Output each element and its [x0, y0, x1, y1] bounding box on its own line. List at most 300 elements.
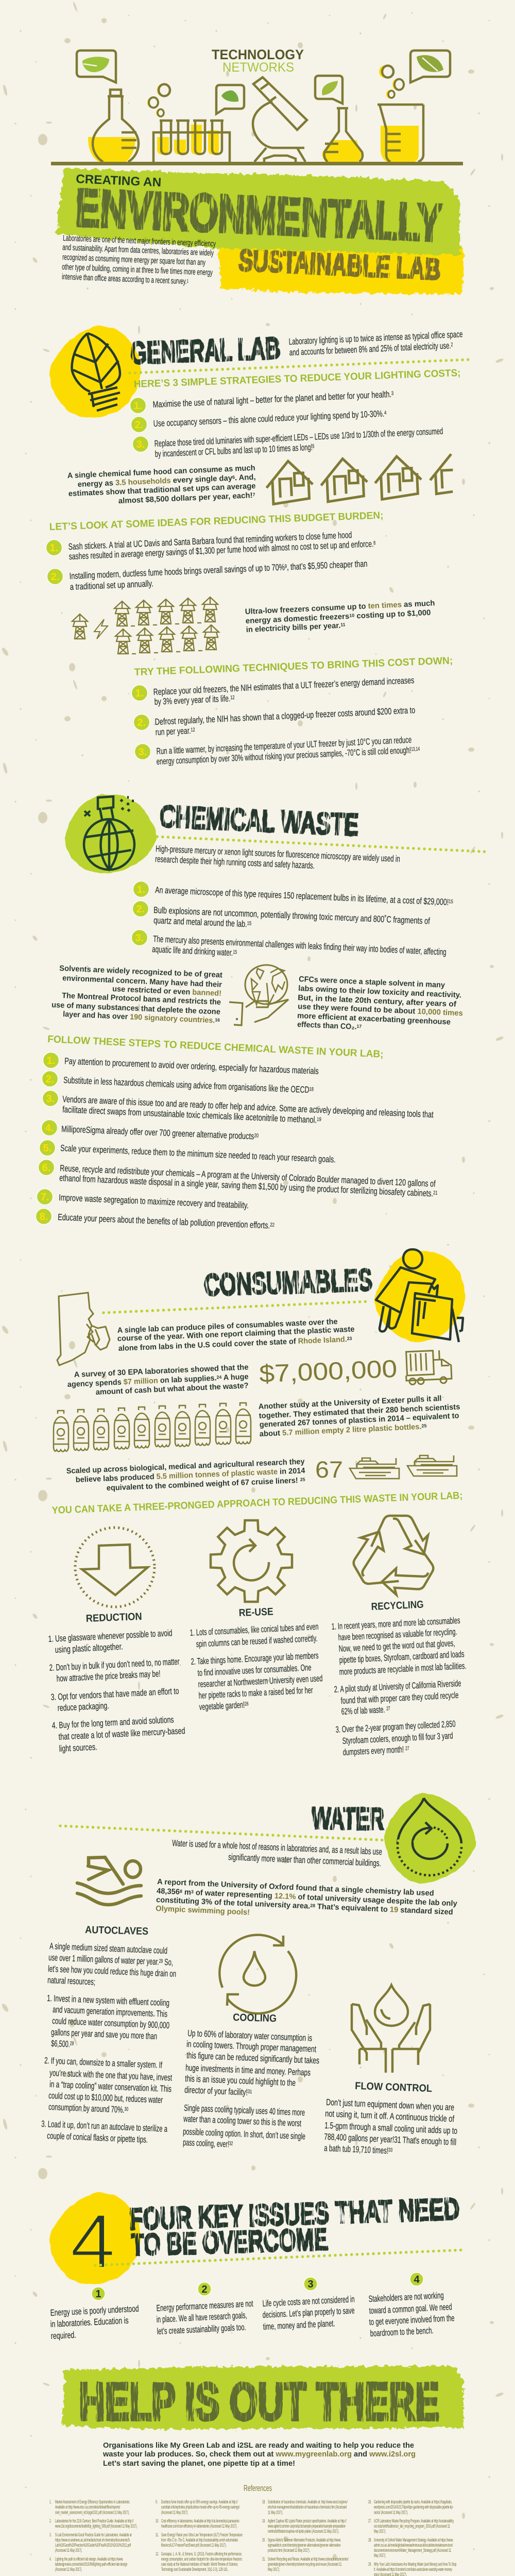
issue 3: 3 — [307, 2279, 314, 2290]
references column 3: methods/filtration/captiva-nd-lipids-plates (Accessed 11 May 2017). — [268, 2529, 339, 2534]
column: cooling: huge investments in time and money. Perhaps — [185, 2062, 311, 2078]
icon: microscope — [253, 77, 307, 162]
list: freezer techniques: 2. — [138, 717, 146, 728]
text: organisations — [102, 2441, 416, 2468]
icon: big number four: 4 — [70, 2198, 115, 2284]
text: Oxford report — [156, 1877, 458, 1917]
issue 4: to get everyone involved from the — [369, 2313, 455, 2327]
list: fume hood ideas: sashes resulted in average energy savings of $1,300 per fume hood with almost no cost to set up and enforce.8 — [68, 538, 376, 562]
text: CFCs: more efficient at exacerbating greenhouse — [297, 1011, 451, 1026]
icon: speech bubble leaf 1 — [77, 50, 116, 82]
text: solvents: The Montreal Protocol bans and restricts the — [62, 991, 221, 1007]
references column 3 — [262, 2499, 355, 2576]
column: recycling: RECYCLING — [371, 1599, 424, 1613]
column: re-use — [190, 1606, 323, 1712]
logo: Technology Networks — [212, 47, 304, 75]
references column 3: 19. — [262, 2518, 266, 2524]
icon: bubbles left — [147, 84, 170, 116]
text: fume hood energy: energy as 3.5 households every single day6. And, — [77, 473, 256, 489]
panel: water — [41, 1793, 476, 2156]
text: EPA survey: amount of cash but what about the waste? — [95, 1381, 249, 1397]
text: CFCs — [297, 975, 463, 1031]
references column 2: Gumapas, L. A. M., & Simons, G. (2013). Factors affecting the performance, — [161, 2551, 242, 2557]
text: EPA survey: agency spends $7 million on lab supplies.24 A huge — [67, 1372, 249, 1389]
list: chemical waste steps: MilliporeSigma already offer over 700 greener alternative products20 — [61, 1124, 259, 1142]
references column 1: S-Lab Environmental Good Practice Guide for Laboratories. Available at — [55, 2532, 132, 2538]
references column 3: sigmaaldrich.com/chemistry/greener-alternatives/greener-alternative- — [268, 2543, 341, 2548]
text: Oxford report: constituting 3% of the total university area.28 That’s equivalent to 19 standard sized — [156, 1895, 453, 1917]
column: autoclaves: 1. Invest in a new system with effluent cooling — [47, 1993, 169, 2008]
text: EPA survey: A survey of 30 EPA laboratories showed that the — [74, 1363, 249, 1379]
text: lighting intensity — [288, 329, 463, 358]
list: chemical waste steps: Improve waste segregation to maximize recovery and treatability. — [59, 1192, 249, 1210]
column: autoclaves: could cost up to $10,000 but, reduces water — [48, 2090, 163, 2105]
list: lighting strategies: Use occupancy sensors – this alone could reduce your lighting spend by 10-30%.4 — [153, 408, 387, 429]
references column 4: UCR Laboratory Waste Recycling Program. Available at http://sustainability. — [374, 2518, 454, 2524]
panel: four key issues — [50, 2192, 465, 2341]
icon: test tube rack — [153, 121, 230, 162]
column: cooling: this figure can be reduced significantly but takes — [186, 2050, 320, 2065]
panel: help is out there — [62, 2366, 464, 2468]
list: chemical waste steps: Pay attention to procurement to avoid over ordering, especially for hazardous materials — [64, 1056, 319, 1076]
text: CFCs: use they were found to be about 10,000 times — [298, 1002, 463, 1018]
text: ultra-low freezers: energy as domestic freezers10 costing up to $1,000 — [245, 608, 431, 625]
list: microscope facts — [132, 881, 453, 958]
text: piles of waste — [117, 1317, 355, 1353]
text: organisations: waste your lab produces. So, check them out at www.mygreenlab.org and www.i2sl.org — [102, 2450, 416, 2459]
heading: follow these steps: FOLLOW THESE STEPS TO REDUCE CHEMICAL WASTE IN YOUR LAB; — [47, 1033, 384, 1060]
list: chemical waste steps: 6. — [42, 1162, 50, 1174]
list: lighting strategies: 3. — [136, 439, 145, 450]
icon: person with bin — [374, 1249, 466, 1342]
text: solvents: environmental concern. Many have had their — [62, 974, 222, 989]
references column 3: Sigma-Aldrich, Greener Alternative Products. Available at http://www. — [268, 2537, 341, 2543]
list: fume hood ideas — [46, 530, 376, 592]
list: chemical waste steps: 3. — [46, 1093, 55, 1105]
column: recycling: Styrofoam coolers, enough to fill four 3 yard — [342, 1731, 453, 1746]
issue 2: let’s create sustainability goals too. — [157, 2322, 246, 2336]
text: Exeter study: generated 267 tonnes of plastics in 2014 – equivalent to — [259, 1411, 459, 1429]
column: re-use: 2. Take things home. Encourage your lab members — [191, 1650, 319, 1667]
intro paragraph: Laboratories are one of the next major frontiers in energy efficiency — [63, 234, 216, 248]
column: autoclaves: $6,500.29 — [51, 2038, 74, 2049]
issue 2: Energy performance measures are not — [156, 2298, 253, 2313]
icon: cooling cycle — [219, 1935, 296, 2013]
references column 4: It. Available at https://consteril.com/labs-autoclaves-wasting-water-money- — [374, 2567, 453, 2572]
list: chemical waste steps — [36, 1052, 438, 1231]
column: reduction: 3. Opt for vendors that have made an effort to — [50, 1686, 179, 1702]
text: Oxford report: A report from the University of Oxford found that a single chemistry lab used — [157, 1877, 434, 1898]
icon: round flask — [88, 90, 139, 162]
icon: beaker — [377, 105, 423, 162]
list: freezer techniques: by 3% every year of its life.12 — [154, 693, 235, 707]
references column 4: racks/ (Accessed 11 May 2017). — [374, 2510, 408, 2515]
stat: seven million: $7,000,000 — [259, 1355, 398, 1388]
list: fume hood ideas: 1. — [50, 543, 58, 554]
column: autoclaves — [41, 1924, 176, 2145]
column: reduction: 4. Buy for the long term and avoid solutions — [52, 1714, 174, 1731]
title line 1: CREATING AN — [76, 172, 162, 190]
column: autoclaves: in a “trap cooling” water conservation kit. This — [49, 2079, 172, 2094]
icon: erlenmeyer flask — [322, 108, 363, 162]
logo: Technology Networks: TECHNOLOGY — [212, 47, 304, 62]
text: CFCs: effects than CO₂.17 — [297, 1020, 362, 1031]
column: recycling — [331, 1599, 467, 1757]
references column 3: May 2017). — [268, 2567, 280, 2572]
text: scaled up — [66, 1457, 305, 1493]
references column 2: energy consumption, and carbon footprint for ultra-low temperature freezers: — [161, 2556, 243, 2562]
column: autoclaves: you’re stuck with the one that you have, invest — [49, 2067, 173, 2083]
icon: leaf bulb — [50, 326, 141, 418]
references column 3: www.agilent.com/en-us/products/sample-preparation/sample-preparation- — [267, 2523, 346, 2529]
column: flow control: 1.5-gpm through a small cooling unit adds up to — [324, 2120, 457, 2136]
list: chemical waste steps: 8. — [40, 1211, 48, 1223]
list: chemical waste steps: Substitute in less hazardous chemicals using advice from organisations like the OECD18 — [63, 1075, 314, 1095]
list: lighting strategies: 2. — [135, 419, 143, 431]
text: Exeter study: Another study at the University of Exeter pulls it all — [258, 1394, 442, 1411]
text: solvents: use of many substances that deplete the ozone — [52, 1001, 220, 1016]
text: EPA survey — [67, 1363, 249, 1397]
issue 1: in laboratories. Education is — [50, 2315, 129, 2329]
column: reduction: how attractive the price breaks may be! — [56, 1668, 161, 1684]
issue 4: Stakeholders are not working — [368, 2290, 444, 2304]
column: re-use: researcher at Northwestern University even used — [198, 1673, 323, 1689]
title line 3: SUSTAINABLE LAB — [237, 244, 441, 286]
column: re-use: to find innovative uses for consumables. One — [197, 1662, 312, 1678]
heading: general lab: GENERAL LAB — [130, 331, 281, 370]
intro paragraph: recognized as consuming more energy per square foot than any — [62, 253, 205, 267]
issue 2: in place. We all have research goals, — [156, 2310, 247, 2325]
panel: general lab — [46, 326, 468, 767]
heading: four key issues — [129, 2192, 460, 2262]
references column 4 — [368, 2499, 459, 2576]
column: autoclaves: natural resources; — [47, 1975, 96, 1987]
references column 1: (Accessed 11 May 2017). — [55, 2548, 82, 2553]
icon: speech bubble leaf 3 — [315, 76, 342, 104]
text: organisations: Let’s start saving the planet, one pipette tip at a time! — [103, 2459, 295, 2468]
issue 1: required. — [50, 2330, 76, 2341]
list: chemical waste steps: 5. — [43, 1143, 52, 1154]
text: scaled up: equivalent to the combined weight of 67 cruise liners! 25 — [106, 1476, 305, 1493]
text: water use: Water is used for a whole host of reasons in laboratories and, as a result labs use — [172, 1838, 382, 1857]
icon: recycling — [344, 1516, 442, 1604]
list: fume hood ideas: Sash stickers. A trial at UC Davis and Santa Barbara found that reminding workers to close fume hood — [68, 530, 352, 552]
column: autoclaves: consumption by around 70%.30 — [48, 2102, 129, 2115]
text: fume hood energy: almost $8,500 dollars per year, each!7 — [118, 491, 255, 505]
column: autoclaves: gallons per year and save you more than — [51, 2027, 157, 2041]
text: Exeter study: together. They estimated that their 280 bench scientists — [259, 1402, 460, 1420]
references column 1: www.i2sl.org/documents/toolkit/bp_lighting_508.pdf (Accessed 11 May 2017). — [55, 2523, 138, 2529]
column: cooling: director of your facility!31 — [184, 2084, 252, 2097]
column: recycling: dumpsters every month! 27 — [342, 1744, 409, 1757]
column: cooling: Up to 60% of laboratory water consumption is — [187, 2028, 313, 2043]
column: re-use: RE-USE — [238, 1606, 273, 1619]
references column 3: products.html (Accessed 11 May 2017). — [268, 2548, 310, 2553]
column: re-use: vegetable garden!26 — [199, 1699, 249, 1712]
text: solvents — [52, 964, 222, 1025]
references column 1: Laboratories for the 21St Century: Best Practice Guide. Available at http:// — [55, 2518, 133, 2524]
references column 2: (Accessed 11 May 2017). — [161, 2510, 188, 2515]
references column 4: ucr.edu/certification/ucr_lab_recycling_program_2016.pdf (Accessed 11 — [374, 2523, 450, 2529]
list: chemical waste steps: 7. — [41, 1192, 49, 1203]
text: fume hood energy — [67, 464, 256, 505]
list: freezer techniques: Defrost regularly, the NIH has shown that a clogged-up freezer costs around $200 extra to — [154, 705, 416, 727]
yellow brush block — [218, 248, 464, 295]
references column 4: documents/environment/Water_Management_Strategy.pdf (Accessed 11 — [374, 2548, 451, 2553]
heading: consumables: CONSUMABLES — [203, 1263, 373, 1302]
list: lighting strategies — [130, 389, 443, 459]
list: freezer techniques: 1. — [135, 688, 144, 699]
text: ultra-low freezers: Ultra-low freezers consume up to ten times as much — [245, 599, 435, 616]
column: flow control: not using it, turn it off. A continuous trickle of — [325, 2108, 455, 2124]
text: piles of waste: course of the year. With one report claiming that the plastic waste — [117, 1325, 355, 1343]
intro paragraph — [62, 234, 216, 286]
references column 1: https://www.st-andrews.ac.uk/media/school-of-chemistry/documents/S- — [55, 2537, 131, 2543]
icon: speech bubble leaf 2 — [216, 85, 244, 114]
green brush block — [57, 168, 460, 255]
references column 3: 20. — [262, 2537, 266, 2543]
references column 1: Market Assessment of Energy Efficiency Opportunities in Laboratories. — [55, 2499, 130, 2505]
column: cooling: in cooling towers. Through proper management — [186, 2039, 317, 2054]
icon: truck — [405, 1350, 452, 1385]
icon: re-use gear — [211, 1520, 292, 1602]
column: reduction: reduce packaging. — [57, 1700, 109, 1713]
column: re-use: her pipette racks to make a raised bed for her — [198, 1685, 313, 1701]
references column 1: Lighting the path to efficient lab design. Available at https://www. — [55, 2556, 123, 2562]
text: CFCs: labs owing to their low toxicity and reactivity. — [298, 984, 461, 999]
references column 3: Solvent Recycling and Reuse. Available at http://www.colorado.edu/ecenter/ — [268, 2556, 349, 2562]
heading: three-pronged: YOU CAN TAKE A THREE-PRONGED APPROACH TO REDUCING THIS WASTE IN YOUR LAB; — [52, 1490, 463, 1516]
text: Oxford report: 48,3568 m3 of water representing 12.1% of total university usage despite the lab only — [157, 1887, 458, 1908]
references column 1: ceel_market_assessment_et14pge1531.pdf (Accessed 11 May 2017). — [55, 2510, 129, 2515]
text: CFCs: But, in the late 20th century, after years of — [298, 993, 457, 1009]
list: chemical waste steps: 1. — [47, 1055, 55, 1066]
references column 4: 28. — [368, 2537, 372, 2543]
text: solvents: layer and has over 190 signatory countries.16 — [63, 1010, 220, 1025]
list: chemical waste steps: Educate your peers about the benefits of lab pollution prevention efforts.22 — [58, 1212, 274, 1231]
references column 3: 18. — [262, 2499, 266, 2505]
references column 3: ehs/risk-management/substitution-of-hazardous-chemicals.htm (Accessed — [268, 2504, 347, 2510]
references column 1: Available at http://www.etcc-ca.com/sites/default/files/reports/ — [55, 2504, 120, 2510]
list: lighting strategies: 1. — [134, 400, 142, 412]
references column 2 — [156, 2499, 246, 2576]
references column 1: 1. — [49, 2499, 52, 2505]
references column 1: 2. — [49, 2518, 52, 2524]
heading: freezer techniques: TRY THE FOLLOWING TECHNIQUES TO BRING THIS COST DOWN; — [134, 655, 453, 678]
list: fume hood ideas: 2. — [51, 571, 59, 583]
list: chemical waste steps: facilitate direct swaps from unsustainable toxic chemicals like acetonitrile to methanol.19 — [62, 1104, 321, 1125]
column: reduction: REDUCTION — [85, 1611, 142, 1624]
shelf — [51, 162, 463, 165]
list: chemical waste steps: Scale your experiments, reduce them to the minimum size needed to reach your research goals. — [60, 1143, 336, 1164]
text: Exeter study: about 5.7 million empty 2 litre plastic bottles.25 — [259, 1422, 427, 1438]
column: reduction: 1. Use glassware whenever possible to avoid — [48, 1628, 173, 1644]
column: autoclaves: use over 1 million gallons of water per year.29 So, — [48, 1952, 173, 1968]
column: flow control: Don’t just turn equipment down when you are — [326, 2097, 454, 2112]
icon: Rhode Island — [57, 1293, 110, 1365]
issue 3: decisions. Let’s plan properly to save — [262, 2305, 355, 2320]
column: autoclaves: could reduce water consumption by 900,000 — [52, 2015, 170, 2030]
list: microscope facts: quartz and metal around the lab.15 — [153, 915, 252, 929]
references column 2: 9. — [156, 2499, 158, 2505]
issue 3: Life cycle costs are not considered in — [262, 2294, 355, 2309]
references column 3: Substitution of hazardous chemicals. Available at: http://www.oecd.org/env/ — [268, 2499, 348, 2505]
stat: 67 cruise liners: 67 — [315, 1456, 343, 1483]
references column 4: 26. — [368, 2499, 372, 2505]
column: cooling: this is an issue you could highlight to the — [185, 2073, 296, 2088]
references column 1: 4. — [49, 2556, 52, 2562]
heading: budget burden: LET’S LOOK AT SOME IDEAS FOR REDUCING THIS BUDGET BURDEN; — [49, 510, 384, 533]
list: microscope facts: 2. — [136, 904, 145, 915]
list: freezer techniques: 3. — [139, 747, 147, 758]
icon: ten bottles — [54, 1403, 251, 1452]
column: re-use: spin columns can be reused if washed correctly. — [196, 1633, 318, 1649]
column: reduction: light sources. — [59, 1741, 97, 1754]
panel: chemical waste — [36, 794, 485, 1231]
issue 4: boardroom to the bench. — [370, 2325, 434, 2338]
references column 2: 12. — [156, 2551, 159, 2557]
references column 4: wordpress.com/2014/02/17/tips4tips-gardening-with-disposable-pipette-tip- — [373, 2504, 454, 2510]
panel: title — [57, 168, 464, 295]
list: fume hood ideas: a traditional set up annually. — [70, 578, 153, 592]
list: chemical waste steps: 2. — [46, 1074, 54, 1085]
column: reduction — [48, 1611, 185, 1754]
icon: water drop cycle — [385, 1793, 476, 1884]
references column 2: 11. — [156, 2532, 159, 2538]
icon: bubbles right — [379, 65, 404, 98]
references column 1: Lab%20Good%20Practice%20Guide%20Final%2031%2010%2011.pdf — [55, 2543, 131, 2548]
column: reduction: 2. Don’t buy in bulk if you don’t need to, no matter — [49, 1656, 180, 1673]
references column 4: May 2017). — [374, 2553, 386, 2558]
column: autoclaves: couple of conical flasks or pipette tips. — [47, 2130, 148, 2145]
issue 1 — [50, 2287, 139, 2341]
text: solvents: Solvents are widely recognized to be of great — [59, 964, 222, 979]
text: Exeter study — [258, 1394, 460, 1438]
list: freezer techniques — [132, 675, 420, 767]
column: reduction: using plastic altogether. — [55, 1641, 123, 1655]
text: CFCs: CFCs were once a staple solvent in many — [299, 975, 445, 990]
references column 2: camblab.info/wp/index.php/ductless-hoods-offer-up-to-95-energy-savings/ — [161, 2504, 239, 2510]
column: cooling — [183, 2012, 320, 2149]
text: scaled up: believe labs produced 5.5 million tonnes of plastic waste in 2014 — [75, 1466, 305, 1484]
text: organisations: Organisations like My Green Lab and i2SL are ready and waiting to help you reduce the — [103, 2441, 414, 2450]
references column 3: Agilent Captiva ND Lipids Plates product specifications. Available at http:// — [268, 2518, 347, 2524]
column: cooling: pass cooling, ever!32 — [183, 2137, 233, 2149]
column: recycling: 62% of lab waste. 27 — [341, 1704, 390, 1717]
text: water use: significantly more water than other commercial buildings. — [228, 1852, 381, 1868]
icon: houses — [265, 454, 454, 504]
icon: flask globe — [65, 794, 157, 873]
references column 3: greenlabs/green-chemistry/solvent-recycling-and-reuse (Accessed 11 — [268, 2562, 341, 2567]
intro paragraph: intensive than office areas according to a recent survey.1 — [62, 273, 188, 286]
icon: swimmer — [77, 1857, 141, 1905]
column: autoclaves: and vacuum generation improvements. This — [53, 2004, 168, 2019]
references column 2: case study at the National Institutes of Health. World Review of Science, — [161, 2562, 238, 2567]
intro paragraph: and sustainability. Apart from data centres, laboratories are widely — [62, 243, 214, 258]
green brush block — [62, 2366, 464, 2430]
intro paragraph: other type of building, coming in at three to five times more energy — [62, 263, 213, 277]
references column 2: 10. — [156, 2518, 159, 2524]
text: water use — [172, 1838, 382, 1868]
references column 2: from -80o C to -70o C. Available at http://sustainability.umich.edu/media/ — [161, 2537, 238, 2543]
column: cooling: possible cooling option. In short, don’t use single — [183, 2126, 305, 2142]
icon: hands with drop — [352, 1985, 430, 2073]
text: ultra-low freezers: in electricity bills per year.11 — [246, 621, 346, 634]
text: piles of waste: alone from labs in the U.S could cover the state of Rhode Island.23 — [118, 1335, 352, 1353]
panel: consumables — [48, 1249, 467, 1757]
text: scaled up: Scaled up across biological, medical and agricultural research they — [66, 1457, 305, 1476]
issue 4: 4 — [414, 2274, 420, 2285]
references column 3: 11 May 2017). — [268, 2510, 283, 2515]
column: flow control: a bath tub 19,710 times!33 — [324, 2143, 393, 2156]
references column 2: healthcare.com/cost-efficiency-in-laboratories (Accessed 11 May 2017). — [161, 2523, 237, 2529]
references column 4: 29. — [368, 2562, 372, 2567]
list: freezer techniques: run per year.12 — [155, 725, 195, 737]
column: autoclaves: AUTOCLAVES — [85, 1924, 148, 1937]
references column 4: Why Your Lab’s Autoclaves Are Wasting Water (and Money) and How To Stop — [374, 2562, 456, 2567]
text: mercury light sources: research despite their high running costs and safety hazards. — [155, 854, 315, 871]
references column 1: labdesignnews.com/article/2015/06/lighting-path-efficient-lab-design — [55, 2562, 127, 2567]
text: mercury light sources — [155, 843, 400, 871]
references column 4: May 2017). — [374, 2529, 386, 2534]
references column 4: admin.ox.ac.uk/media/global/wwwadminoxacuk/localsites/estatesservices/ — [374, 2543, 453, 2548]
heading: references: References — [244, 2483, 272, 2493]
column: re-use: 1. Lots of consumables, like conical tubes and even — [190, 1621, 319, 1638]
list: freezer techniques: Replace your old freezers, the NIH estimates that a ULT freezer’s energy demand increases — [153, 675, 415, 697]
column: reduction: that create a lot of waste like mercury-based — [58, 1725, 185, 1742]
references column 1: 3. — [49, 2532, 52, 2538]
issue 3 — [262, 2277, 355, 2332]
icon: globe in hand — [229, 965, 288, 1025]
references column 4: 27. — [368, 2518, 372, 2524]
issue 1: Energy use is poorly understood — [50, 2303, 139, 2318]
references column 1 — [49, 2499, 138, 2576]
column: autoclaves: let’s see how you could reduce this huge drain on — [48, 1963, 176, 1979]
column: flow control — [324, 2080, 457, 2156]
stat: 67 cruise liners — [315, 1455, 457, 1483]
list: lighting strategies: by incandescent or CFL bulbs and last up to 10 times as long!5 — [154, 442, 315, 459]
column: flow control: FLOW CONTROL — [355, 2080, 433, 2094]
list: chemical waste steps: 4. — [45, 1123, 54, 1134]
column: autoclaves: 3. Load it up, don’t run an autoclave to sterilize a — [41, 2119, 168, 2134]
list: lighting strategies: Maximise the use of natural light – better for the planet and better for your health.3 — [152, 389, 394, 410]
issue 2 — [156, 2282, 253, 2336]
references column 4: Gardening with disposable pipette tip racks. Available at https://happilabs. — [374, 2499, 452, 2505]
text: piles of waste: A single lab can produce piles of consumables waste over the — [117, 1317, 338, 1335]
text: fume hood energy: A single chemical fume hood can consume as much — [67, 464, 255, 480]
list: fume hood ideas: Installing modern, ductless fume hoods brings overall savings of up to 70%9, that’s $5,950 cheaper than — [69, 558, 368, 581]
heading: chemical waste: CHEMICAL WASTE — [159, 799, 359, 842]
issue 1: 1 — [95, 2289, 101, 2300]
column: autoclaves: 2. If you can, downsize to a smaller system. If — [44, 2055, 163, 2070]
issue 4 — [368, 2273, 455, 2338]
heading: four key issues: TO BE OVERCOME — [130, 2222, 329, 2262]
text: solvents: use restricted or even banned! — [112, 985, 221, 998]
references column 1: (Accessed 11 May 2017). — [55, 2567, 82, 2572]
references column 2: Save Energy! Raise your Ultra Low Temperature (ULT) Freezer Temperature — [161, 2532, 243, 2538]
issue 3: time, money and the planet. — [263, 2318, 335, 2332]
text: ultra-low freezers — [245, 599, 435, 634]
heading: water: WATER — [312, 1801, 384, 1836]
list: microscope facts: 3. — [135, 933, 144, 944]
list: microscope facts: 1. — [137, 884, 145, 895]
references column 2: Cost efficiency in laboratories. Available at http://uk.biomedical.panasonic- — [161, 2518, 240, 2524]
references column 2: files/ecs/ULT-FreezerFactSheet.pdf (Accessed 11 May 2017). — [161, 2543, 227, 2548]
references column 4: University of Oxford Water Management Strategy. Available at https://www. — [374, 2537, 453, 2543]
panel: references — [49, 2483, 459, 2576]
heading: strategies: HERE’S 3 SIMPLE STRATEGIES TO REDUCE YOUR LIGHTING COSTS; — [133, 367, 461, 390]
text: Oxford report: Olympic swimming pools! — [156, 1904, 250, 1917]
